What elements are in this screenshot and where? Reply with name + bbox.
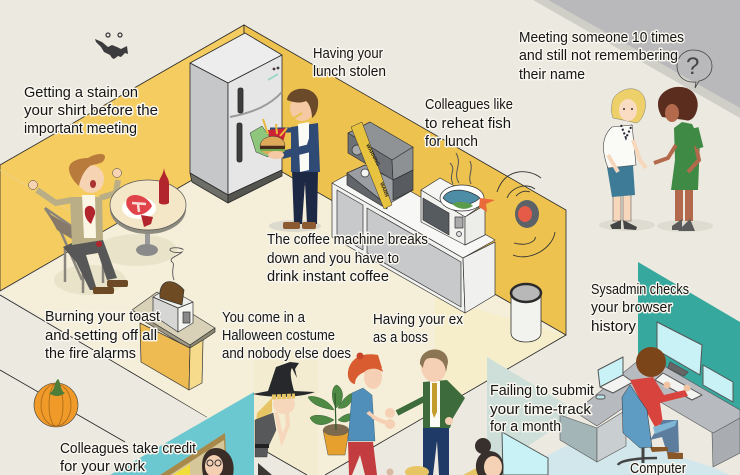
callout: coffee machine breaks: down and you have to [267, 250, 399, 267]
callout: burning toast: and setting off all [45, 327, 157, 344]
callout: credit: for your work [60, 458, 145, 475]
grey corner wall [533, 0, 740, 118]
floor lines [0, 295, 207, 442]
callout: credit: Colleagues take credit [60, 440, 197, 457]
yellow kitchen walls [0, 25, 566, 335]
icon: out-of-order warning tape: WARNING [364, 143, 381, 167]
icon: coffee machine [347, 122, 413, 209]
callout: reheating fish: Colleagues like [425, 96, 513, 113]
callout: burning toast: the fire alarms [45, 345, 136, 362]
person: red-haired woman [348, 352, 395, 475]
icon: smoke [170, 248, 183, 280]
teal office floor and glass wall [487, 262, 740, 475]
person: blonde woman [599, 89, 655, 231]
callout: reheating fish: for lunch [425, 133, 478, 150]
callout: lunch stolen: Having your [313, 45, 383, 62]
person: witch [253, 362, 315, 475]
callout: stain on shirt: important meeting [24, 120, 137, 137]
icon: bat [95, 33, 128, 59]
callout: stain on shirt: Getting a stain on [24, 84, 138, 101]
person: woman with bun [475, 438, 504, 475]
speech bubble: ? [686, 53, 699, 80]
callout: halloween costume: and nobody else does [222, 345, 351, 362]
callout: halloween costume: You come in a [222, 309, 306, 326]
person: woman with glasses [202, 448, 234, 475]
callout: ex as boss: as a boss [373, 329, 428, 346]
callout: coffee machine breaks: drink instant coffee [267, 268, 389, 285]
callout: sysadmin: your browser [591, 299, 672, 316]
callout: reheating fish [425, 96, 513, 150]
callout: credit [60, 440, 197, 475]
person: woman in green dress [654, 87, 713, 232]
callout: ex as boss: Having your ex [373, 311, 463, 328]
person: man stealing lunch [269, 89, 321, 232]
callout: ex as boss [373, 311, 463, 346]
callout: forgetting names: Meeting someone 10 times [519, 29, 684, 46]
callout: sysadmin: history [591, 318, 637, 335]
callout: lunch stolen: lunch stolen [313, 63, 386, 80]
callout: forgetting names [519, 29, 684, 83]
callout: lunch stolen [313, 45, 386, 80]
workstation desk [560, 355, 740, 467]
icon: table with steak and ketchup [110, 168, 186, 256]
teal office wall [110, 392, 254, 475]
callout: reheating fish: to reheat fish [425, 115, 511, 132]
callout: time-track: Failing to submit [490, 382, 595, 399]
callout: burning toast [45, 308, 161, 362]
callout: stain on shirt: your shirt before the [24, 102, 158, 119]
callout: time-track [490, 382, 595, 435]
callout: stain on shirt [24, 84, 158, 137]
icon: pumpkin [34, 379, 78, 427]
kitchen floor [0, 150, 566, 475]
person: sysadmin at desk [618, 347, 690, 465]
icon: out-of-order warning tape: WARN [378, 182, 390, 198]
icon: out-of-order warning tape [351, 122, 392, 209]
callout: burning toast: Burning your toast [45, 308, 161, 325]
icon: kitchen counter [332, 165, 495, 313]
callout: coffee machine breaks [267, 231, 428, 285]
icon: microwave with fish [421, 178, 495, 245]
icon: bin [511, 284, 541, 342]
callout: time-track: your time-track [490, 401, 592, 418]
callout: sysadmin [591, 281, 689, 335]
callout: halloween costume [222, 309, 351, 362]
callout: halloween costume: Halloween costume [222, 327, 335, 344]
icon: stolen lunch [250, 119, 287, 159]
figure at bottom edge [386, 466, 480, 475]
callout: forgetting names: their name [519, 66, 585, 83]
icon: toaster on counter [132, 282, 215, 390]
callout: coffee machine breaks: The coffee machine breaks [267, 231, 428, 248]
icon: fridge [190, 33, 282, 203]
icon: fire alarm [497, 172, 555, 257]
speech bubble [677, 50, 712, 88]
monitors [502, 322, 733, 475]
callout: forgetting names: and still not remembering [519, 47, 678, 64]
person: boss shaking hands [385, 349, 465, 475]
icon: fish smell [450, 153, 471, 184]
callout: sysadmin: Sysadmin checks [591, 281, 689, 298]
icon: potted plant [308, 385, 353, 455]
callout: time-track: for a month [490, 418, 561, 435]
person: man with stain at table [28, 154, 177, 295]
